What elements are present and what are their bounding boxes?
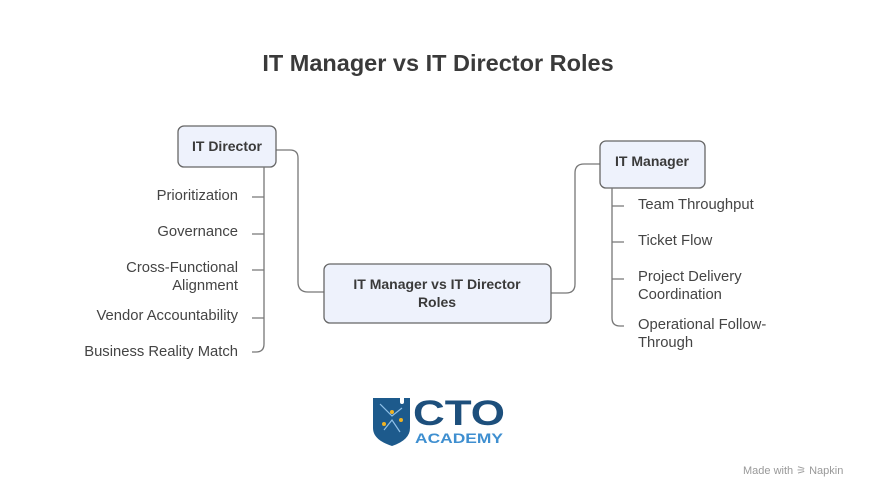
panel: center: IT Manager vs IT Director xyxy=(353,276,521,292)
director items: Cross-Functional xyxy=(126,260,238,276)
panel: center xyxy=(324,264,551,323)
director items: Prioritization xyxy=(157,188,238,204)
manager items: Team Throughput xyxy=(638,197,754,213)
manager items: Coordination xyxy=(638,287,722,303)
badge: made with napkin: Made with ⚞ Napkin xyxy=(743,465,843,477)
manager items: Ticket Flow xyxy=(638,233,713,249)
logo: CTO Academy xyxy=(373,394,505,446)
panel: IT Director xyxy=(84,126,276,360)
manager items xyxy=(638,197,766,351)
connector: center to manager xyxy=(551,164,600,293)
director items: Alignment xyxy=(172,278,238,294)
title: IT Manager vs IT Director Roles xyxy=(262,50,614,76)
director items xyxy=(84,188,239,360)
manager items: Operational Follow- xyxy=(638,317,766,333)
director items: Business Reality Match xyxy=(84,344,238,360)
connector: director to center xyxy=(276,150,324,292)
panel: IT Director: IT Director xyxy=(192,138,263,154)
logo: CTO Academy: CTO xyxy=(413,394,505,433)
logo: CTO Academy: ACADEMY xyxy=(415,430,504,446)
manager items: Through xyxy=(638,335,693,351)
director items: Governance xyxy=(157,224,238,240)
manager items: Project Delivery xyxy=(638,269,742,285)
director items: Vendor Accountability xyxy=(96,308,239,324)
panel: IT Manager xyxy=(600,141,766,351)
panel: IT Manager: IT Manager xyxy=(615,153,690,169)
panel: center: Roles xyxy=(418,294,456,310)
